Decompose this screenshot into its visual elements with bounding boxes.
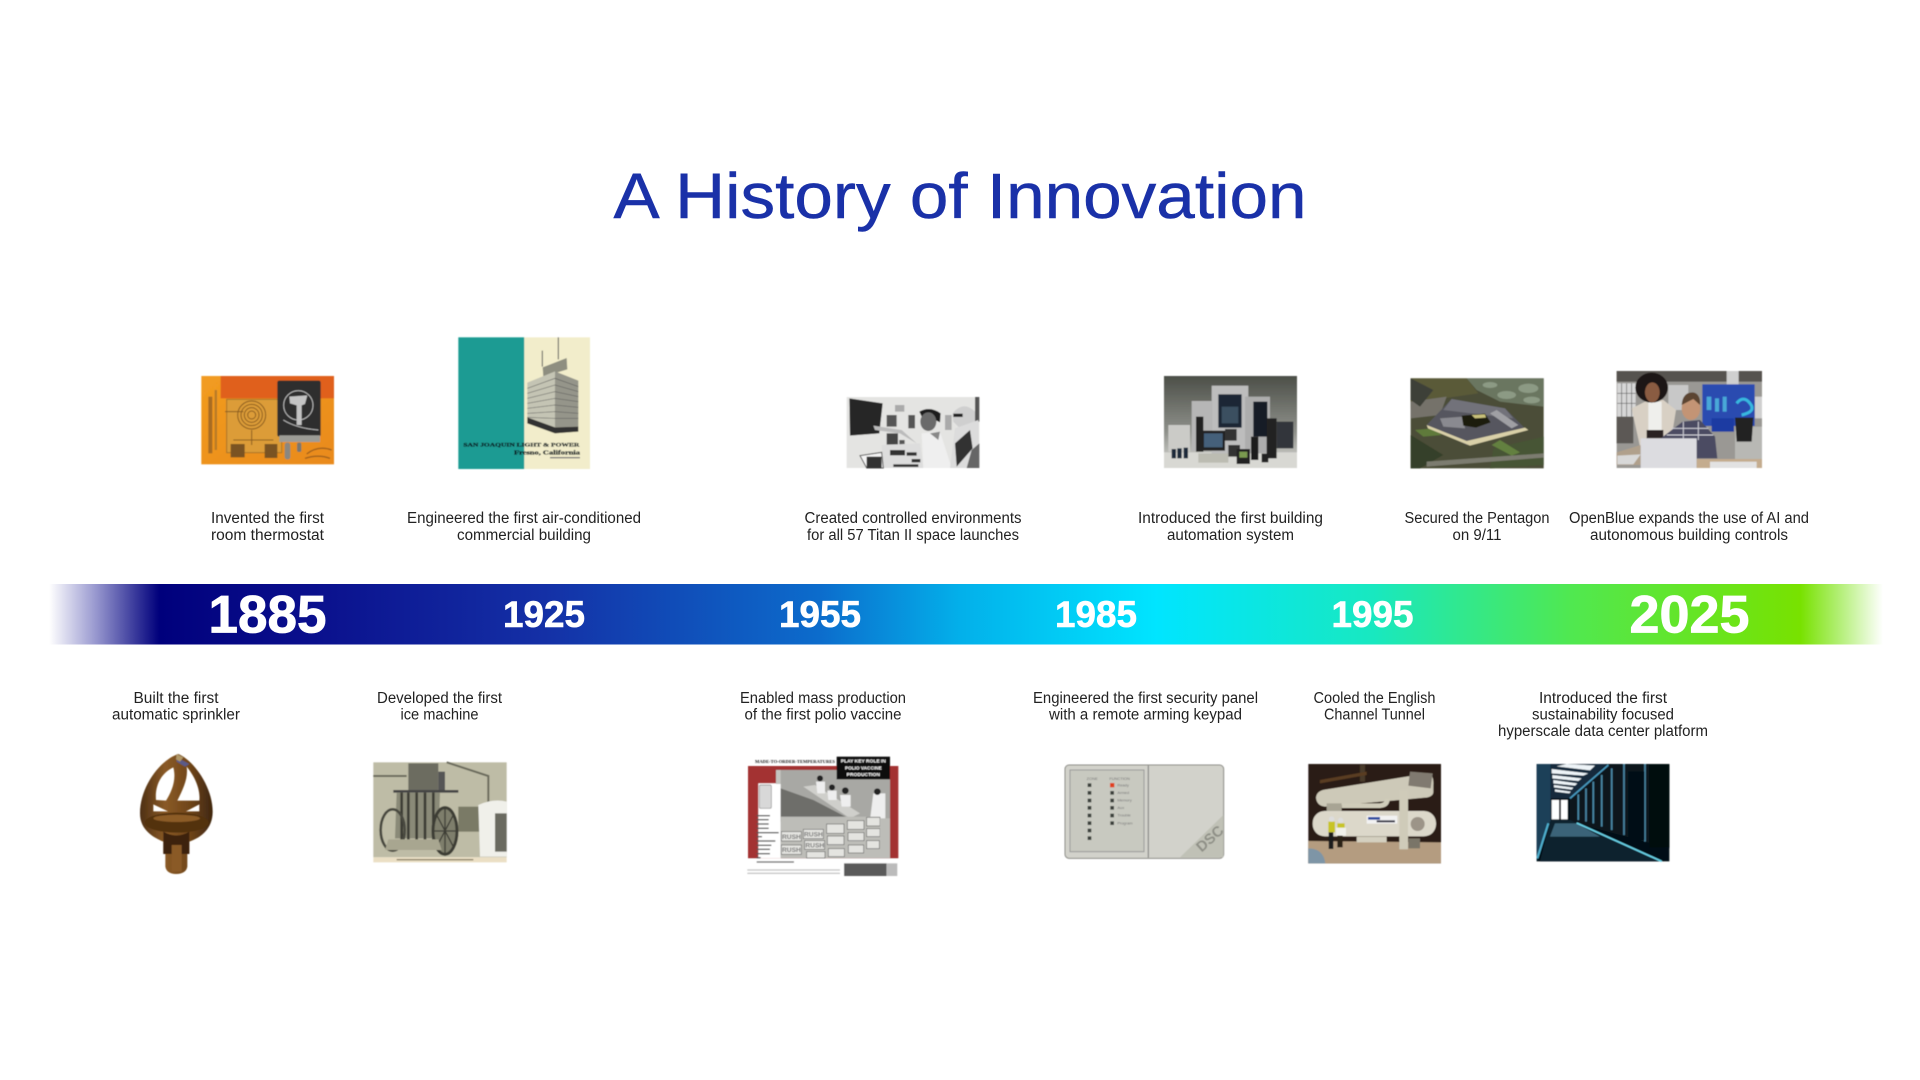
- year: 1995: 1995: [1332, 594, 1414, 635]
- caption: Created controlled environments: [804, 510, 1022, 527]
- caption: Cooled the English: [1314, 690, 1436, 707]
- image: engineers at control panel: [847, 397, 979, 468]
- caption: [211, 510, 325, 544]
- timeline gradient bar: [49, 584, 1883, 644]
- year: 1955: 1955: [779, 594, 861, 635]
- image: aerial view of the Pentagon: [1411, 378, 1544, 468]
- caption: hyperscale data center platform: [1498, 723, 1708, 740]
- caption: with a remote arming keypad: [1048, 706, 1242, 724]
- caption: Engineered the first air-conditioned: [407, 510, 641, 527]
- caption: Engineered the first security panel: [1033, 690, 1258, 707]
- image: DSC security panel: Aux: [1117, 805, 1124, 810]
- image: automation system equipment: [1164, 376, 1297, 468]
- milestone: room thermostat: [201, 376, 334, 544]
- title: A History of Innovation: [614, 160, 1306, 232]
- caption: Built the first: [134, 690, 219, 707]
- milestone: Channel Tunnel: [1308, 690, 1441, 863]
- caption: [407, 510, 641, 544]
- caption: [740, 690, 906, 724]
- milestone: Titan II environments: [804, 397, 1022, 544]
- caption: [377, 690, 503, 724]
- caption: ice machine: [400, 706, 478, 724]
- image: DSC security panel: Program: [1117, 820, 1133, 825]
- milestone: Pentagon: [1404, 378, 1550, 544]
- caption: [1569, 510, 1809, 544]
- caption: Secured the Pentagon: [1404, 510, 1550, 527]
- milestone: building automation: [1138, 376, 1323, 544]
- caption: Introduced the first: [1539, 690, 1668, 707]
- image: two colleagues at a laptop: [1617, 371, 1762, 468]
- year: 1985: 1985: [1055, 594, 1137, 635]
- image: polio vaccine advertisement: PRODUCTION: [847, 772, 881, 777]
- caption: room thermostat: [211, 527, 325, 544]
- milestone: OpenBlue: [1569, 371, 1809, 544]
- image: DSC security panel: Armed: [1117, 790, 1129, 795]
- image: polio vaccine advertisement: RUSH: [782, 834, 801, 841]
- year: 1885: 1885: [208, 586, 326, 644]
- image: San Joaquin Light and Power brochure: SAN JOAQUIN LIGHT & POWER: [463, 443, 581, 449]
- image: thermostat and patent drawing: [201, 376, 334, 464]
- image: DSC security panel: Trouble: [1117, 813, 1131, 818]
- image: San Joaquin Light and Power brochure: Fresno, California: [514, 450, 581, 457]
- image: DSC security panel: Ready: [1117, 782, 1129, 787]
- image: San Joaquin Light and Power brochure: [458, 337, 590, 469]
- image: engraving of an ice machine: [373, 762, 507, 862]
- image: polio vaccine advertisement: MADE-TO-ORDER-TEMPERATURES: [755, 759, 836, 764]
- caption: [1138, 510, 1323, 544]
- milestone: air-conditioned building: [407, 337, 641, 544]
- caption: Invented the first: [211, 510, 325, 527]
- caption: OpenBlue expands the use of AI and: [1569, 510, 1809, 527]
- caption: Channel Tunnel: [1324, 706, 1425, 724]
- image: brass sprinkler head: [140, 754, 213, 874]
- caption: [1033, 690, 1258, 724]
- image: polio vaccine advertisement: RUSH: [782, 847, 801, 854]
- milestone: data center platform: [1498, 690, 1708, 861]
- image: DSC security panel: [1065, 765, 1228, 858]
- image: DSC security panel: ZONE: [1087, 776, 1098, 781]
- caption: autonomous building controls: [1590, 527, 1788, 544]
- caption: automatic sprinkler: [112, 706, 240, 724]
- image: DSC security panel: FUNCTION: [1109, 776, 1130, 781]
- caption: commercial building: [457, 527, 591, 544]
- caption: sustainability focused: [1532, 706, 1674, 724]
- milestone: automatic sprinkler: [112, 690, 240, 874]
- caption: [1404, 510, 1550, 544]
- image: chiller units with two workers: [1308, 764, 1441, 863]
- year: 2025: 2025: [1630, 586, 1750, 644]
- image: polio vaccine advertisement: RUSH: [805, 843, 824, 850]
- image: data center corridor: [1537, 764, 1669, 861]
- caption: for all 57 Titan II space launches: [807, 527, 1019, 544]
- caption: automation system: [1167, 527, 1294, 544]
- image: polio vaccine advertisement: RUSH: [804, 832, 823, 839]
- image: DSC security panel: Memory: [1117, 798, 1132, 803]
- image: polio vaccine advertisement: PLAY KEY ROLE IN: [841, 759, 886, 764]
- image: polio vaccine advertisement: [747, 757, 898, 876]
- caption: on 9/11: [1452, 527, 1502, 544]
- milestone: security panel: [1033, 690, 1258, 858]
- milestone: polio vaccine: [740, 690, 906, 876]
- caption: [1314, 690, 1436, 724]
- caption: [1498, 690, 1708, 740]
- milestone: ice machine: [373, 690, 507, 862]
- image: DSC security panel: DSC: [1194, 823, 1228, 856]
- caption: of the first polio vaccine: [744, 706, 902, 724]
- caption: Developed the first: [377, 690, 503, 707]
- image: polio vaccine advertisement: POLIO VACCINE: [845, 765, 882, 770]
- caption: [112, 690, 240, 724]
- year: 1925: 1925: [503, 594, 585, 635]
- caption: Enabled mass production: [740, 690, 906, 707]
- caption: Introduced the first building: [1138, 510, 1323, 527]
- caption: [804, 510, 1022, 544]
